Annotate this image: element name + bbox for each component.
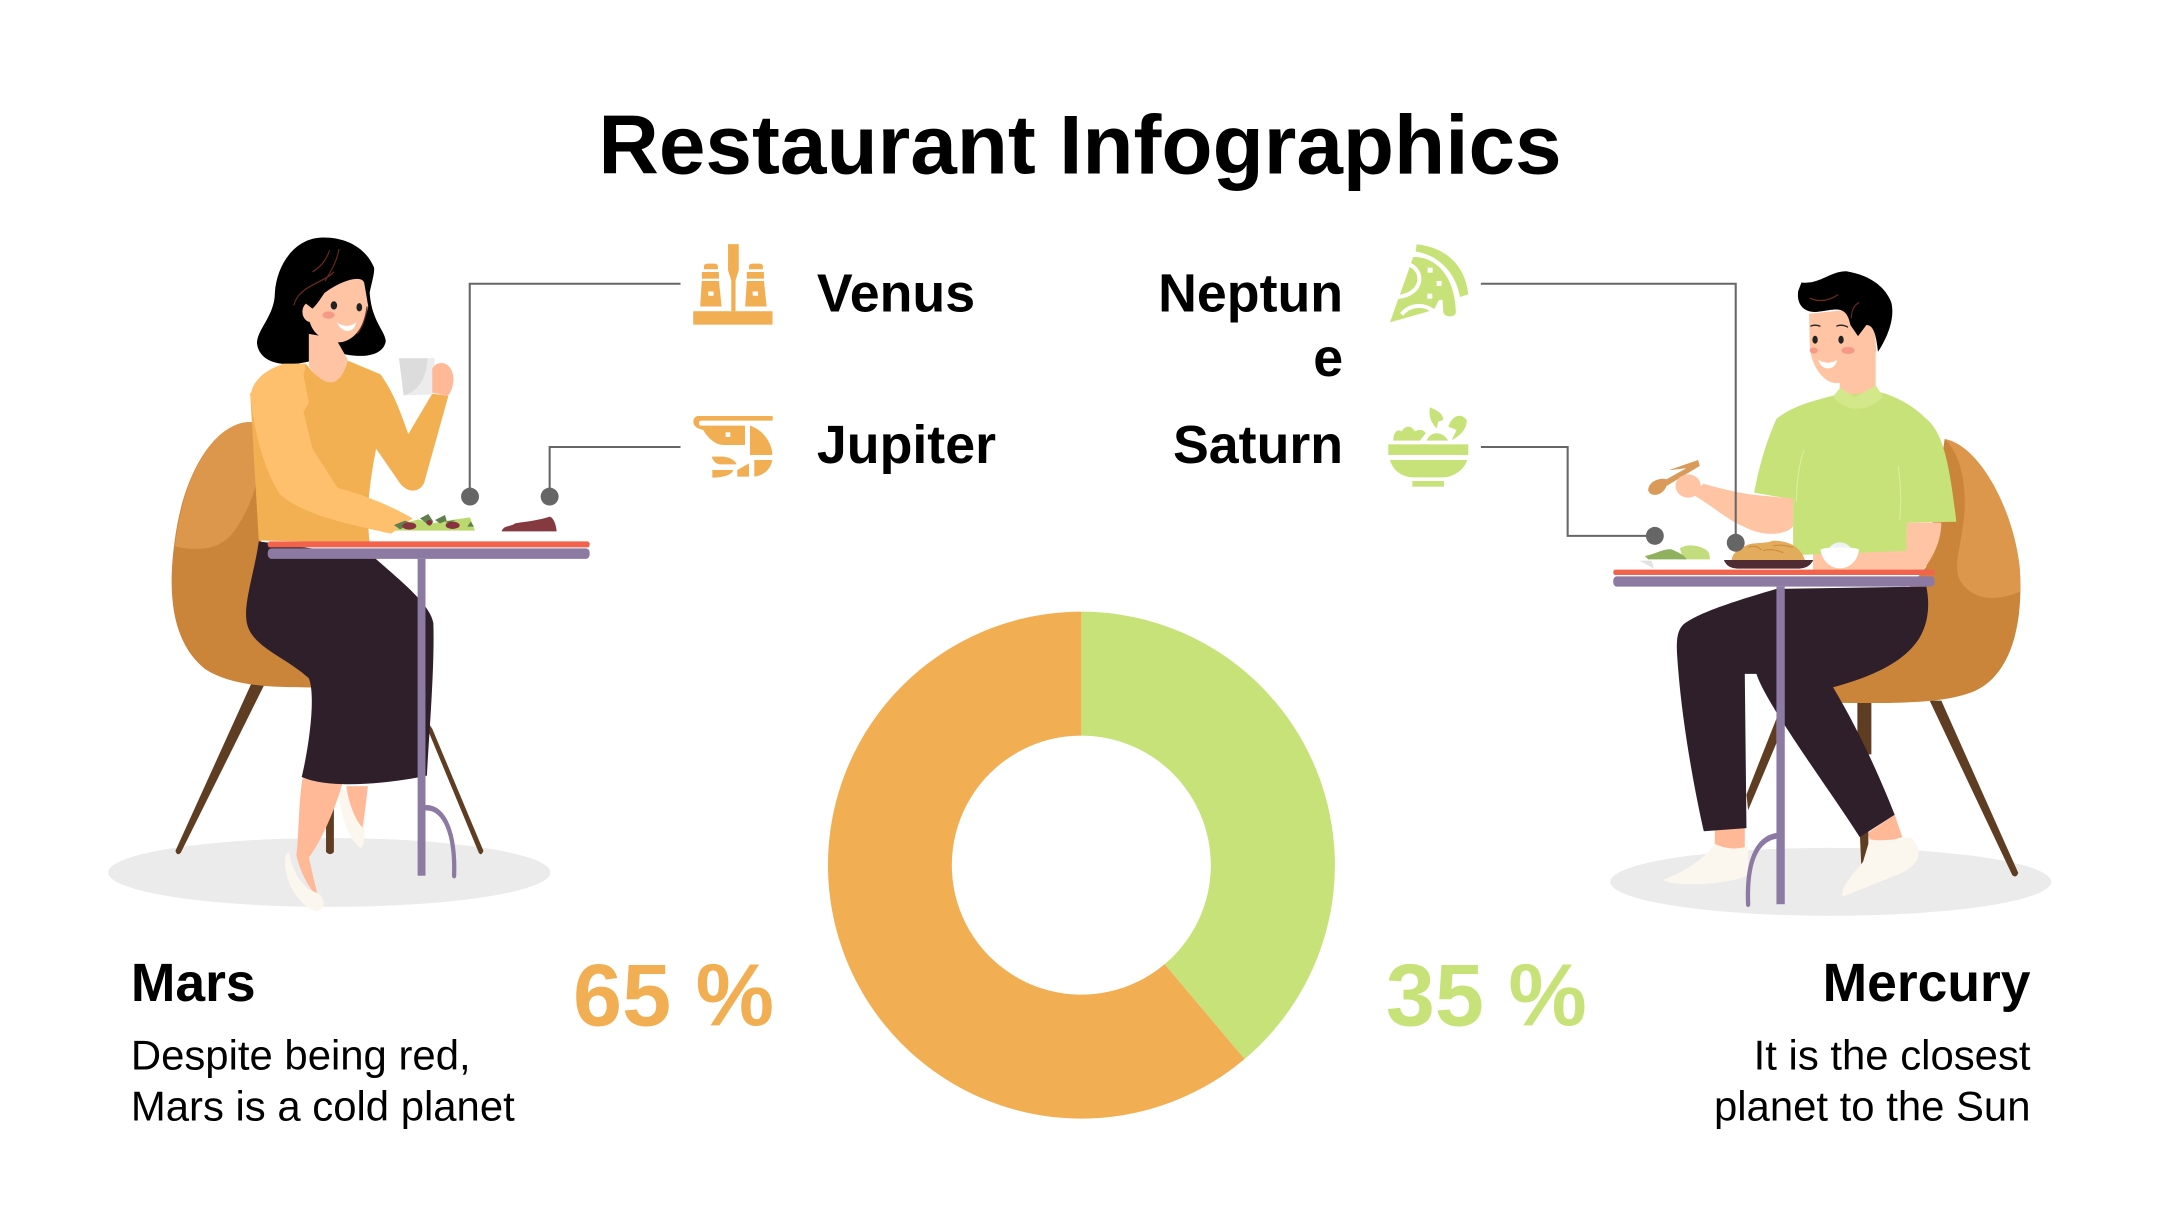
connector: Neptune xyxy=(1481,284,1745,552)
food: woman's salad and steak xyxy=(394,514,557,531)
table top purple xyxy=(268,548,590,559)
floor shadow xyxy=(108,838,550,907)
face xyxy=(309,279,368,342)
label: Saturn: Saturn xyxy=(1173,415,1343,475)
table top red xyxy=(1613,570,1935,575)
hand xyxy=(432,363,453,396)
eyes xyxy=(1812,336,1844,344)
light salad leaf xyxy=(1680,545,1710,559)
hand xyxy=(1676,474,1701,498)
blush xyxy=(1810,347,1855,354)
blush xyxy=(322,311,335,319)
collar xyxy=(1833,385,1883,409)
table pole xyxy=(1776,587,1785,904)
face xyxy=(1809,307,1876,383)
rear arm xyxy=(1813,523,1941,570)
table top red xyxy=(268,541,590,547)
rear leg xyxy=(346,786,368,827)
noodle strands xyxy=(1748,545,1793,553)
shirt xyxy=(1754,392,1956,555)
description: Mars: Mars is a cold planet xyxy=(131,1083,515,1130)
chair highlight xyxy=(175,422,261,549)
cup xyxy=(399,358,435,395)
table top purple xyxy=(1613,576,1935,587)
donut segment: orange xyxy=(828,612,1245,1119)
pants xyxy=(1677,587,1928,837)
noodles xyxy=(1732,541,1805,560)
description: Mercury: planet to the Sun xyxy=(1714,1083,2031,1130)
skirt xyxy=(246,541,434,784)
chair seat xyxy=(172,422,312,687)
floor shadow xyxy=(1610,848,2051,916)
connector: Saturn xyxy=(1481,447,1664,545)
icon: salad bowl xyxy=(1388,407,1468,487)
donut chart xyxy=(828,612,1335,1119)
smile xyxy=(337,322,356,331)
bangs xyxy=(303,244,374,309)
ankles xyxy=(1715,815,1902,851)
icon: pizza xyxy=(1390,244,1468,322)
salad dark leaves xyxy=(394,514,474,529)
front arm xyxy=(1693,484,1793,534)
heading: Mercury: Mercury xyxy=(1823,954,2031,1013)
label: Neptune: Neptun xyxy=(1158,263,1343,323)
hair back xyxy=(257,237,386,364)
cup shade xyxy=(399,358,428,395)
salad olives xyxy=(402,520,460,530)
label: Venus: Venus xyxy=(817,263,975,323)
front leg xyxy=(296,778,343,896)
neck xyxy=(309,334,347,382)
label: Neptune: e xyxy=(1313,328,1343,388)
rice mound xyxy=(1828,542,1852,549)
icon: salt and pepper xyxy=(693,244,773,325)
steak xyxy=(502,517,557,531)
illustration: woman at table xyxy=(108,237,590,912)
table pole xyxy=(418,559,425,876)
icon: shrimp xyxy=(693,416,773,478)
sweater sleeve xyxy=(251,364,413,534)
right shoe xyxy=(1842,837,1919,897)
spoon xyxy=(1648,460,1700,495)
illustration: man at table xyxy=(1610,271,2051,916)
heading: Mars: Mars xyxy=(131,954,256,1013)
connector: Venus xyxy=(461,284,681,506)
percentage: 35 %: 35 % xyxy=(1386,946,1587,1045)
donut segment: green xyxy=(1081,612,1335,1059)
chair seat xyxy=(1833,439,2020,703)
rear foot xyxy=(338,786,368,848)
sweater xyxy=(250,361,448,543)
plate xyxy=(370,534,565,541)
hair strands xyxy=(1810,295,1859,318)
ear xyxy=(302,302,319,322)
text block: Mercury xyxy=(1714,954,2031,1130)
percentage: 65 %: 65 % xyxy=(573,946,774,1045)
table foot xyxy=(425,808,454,876)
neck xyxy=(1840,343,1876,400)
text block: Mars xyxy=(131,954,515,1130)
shirt folds xyxy=(1796,450,1901,520)
hair strands xyxy=(294,249,367,334)
chair legs xyxy=(175,683,483,854)
chair highlight xyxy=(1945,439,2026,598)
smile xyxy=(1818,360,1837,368)
eyes xyxy=(331,301,362,311)
chair legs xyxy=(1746,701,2018,876)
hair xyxy=(1798,271,1892,352)
rice bowl xyxy=(1821,547,1859,568)
dark plate xyxy=(1724,560,1813,569)
salad greens xyxy=(395,517,475,531)
front shoe xyxy=(285,852,324,912)
food: man's salad, noodles and rice xyxy=(1639,541,1859,569)
brows xyxy=(1810,325,1848,327)
left shoe xyxy=(1663,844,1748,884)
salad plate rim xyxy=(1639,561,1654,569)
table foot xyxy=(1748,836,1776,904)
description: Mercury: It is the closest xyxy=(1754,1032,2031,1079)
connector: Jupiter xyxy=(541,447,681,506)
label: Jupiter: Jupiter xyxy=(817,415,996,475)
description: Mars: Despite being red, xyxy=(131,1032,471,1079)
title: Restaurant Infographics xyxy=(598,98,1562,192)
dark salad leaf xyxy=(1645,549,1687,559)
